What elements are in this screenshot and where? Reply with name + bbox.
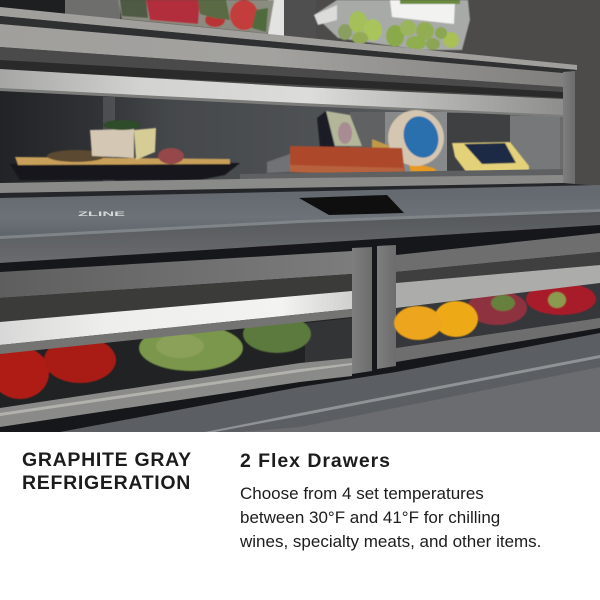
upper bottom rail [240,169,563,180]
strawberries container [118,0,274,34]
photo: refrigerator with open flex drawers [0,0,600,432]
center drawer posts [352,247,372,374]
body text [240,484,541,551]
dark gap behind drawers [0,225,600,432]
upper window interior [0,90,563,185]
heading: graphite gray refrigeration [22,449,192,494]
body text: Choose from 4 set temperatures [240,484,484,503]
brand mark: ZLINE [78,212,125,218]
lower gray trim and door panel [60,333,600,432]
left drawer [0,251,352,427]
gray control counter [0,185,600,263]
right drawer [394,233,600,362]
artichokes [139,315,311,371]
control panel [299,195,404,215]
cheese packages [267,110,529,177]
heading: graphite gray refrigeration: GRAPHITE GRAY [22,449,192,471]
white handle strip upper [0,69,563,117]
top shelf rail [0,7,577,98]
plate with cake, crackers, and salami [10,120,240,180]
body text: wines, specialty meats, and other items. [240,532,541,551]
subheading: 2 flex drawers: 2 Flex Drawers [240,450,391,472]
yellow peppers [394,301,478,340]
grapes container [314,0,470,50]
heading: graphite gray refrigeration: REFRIGERATION [22,472,191,494]
red and green bell peppers [467,283,596,325]
right vertical post upper [563,71,575,184]
red peppers [0,337,116,399]
background wall [0,0,600,432]
body text: between 30°F and 41°F for chilling [240,508,500,527]
